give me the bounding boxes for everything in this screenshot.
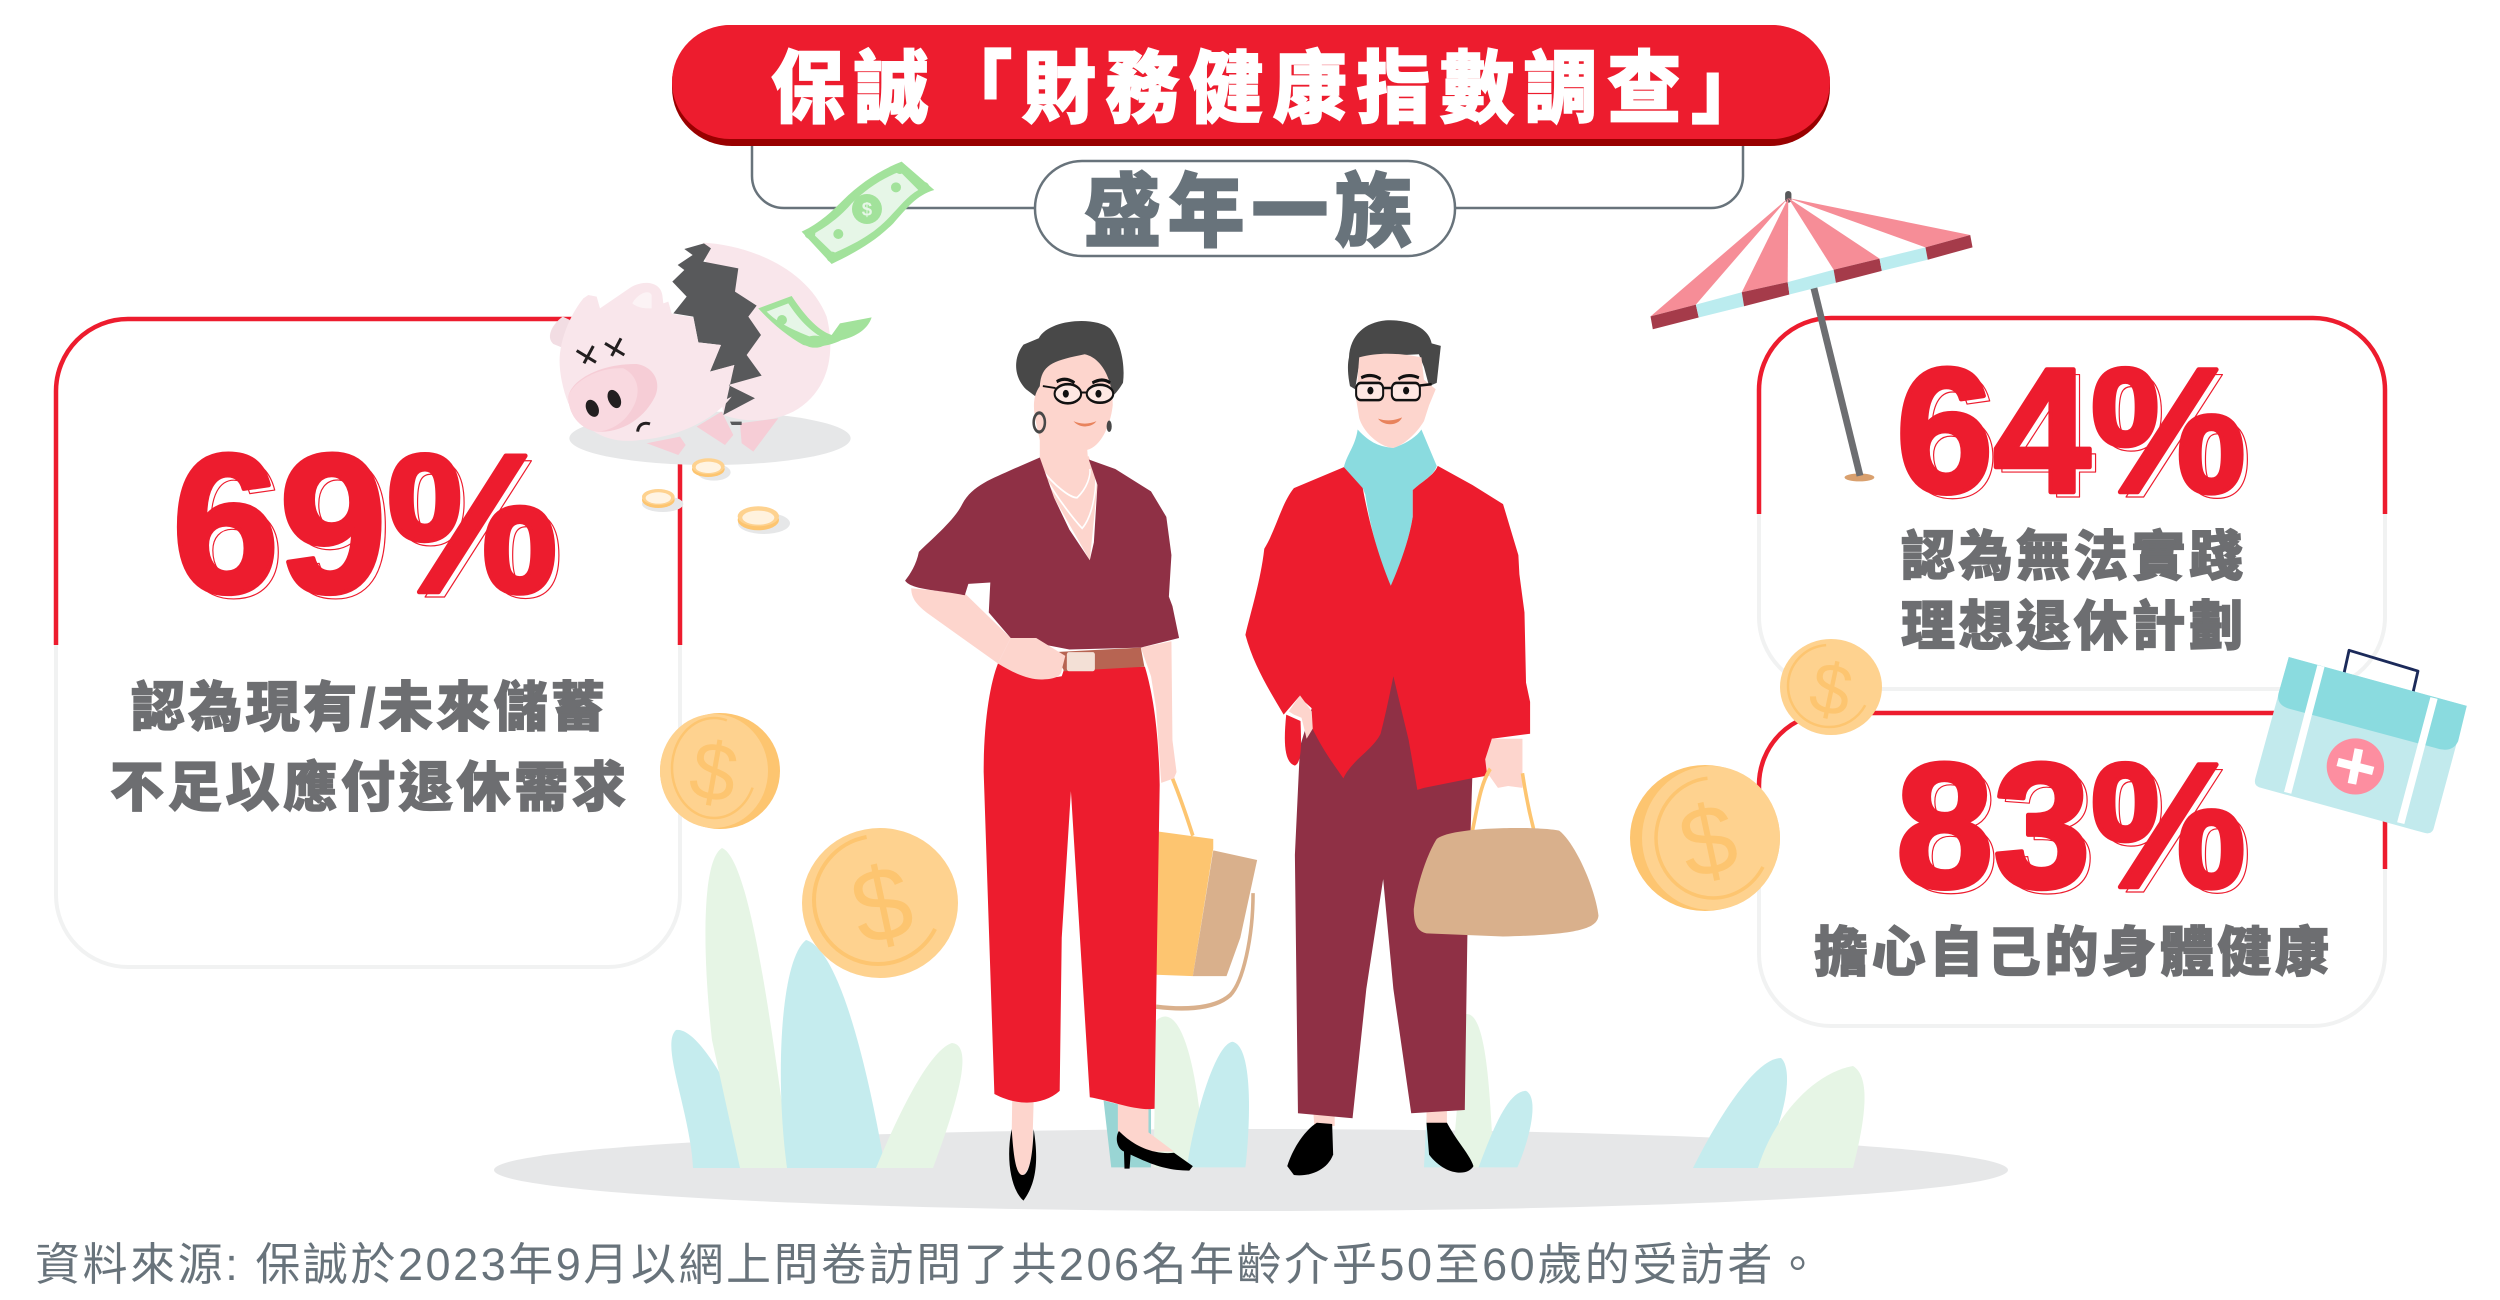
coin: right small	[1780, 639, 1882, 735]
woman: face and hair	[1016, 321, 1124, 469]
man: left hand in pocket	[1285, 695, 1313, 766]
woman: legs and shoes	[1009, 1097, 1193, 1201]
icon: banknote	[802, 162, 934, 264]
icon: first aid kit	[2255, 650, 2467, 833]
flying banknote and piggy bank	[550, 162, 934, 534]
label: savings: 認為現有/未來儲蓄	[131, 678, 605, 738]
man: handbag	[1414, 739, 1598, 937]
woman: hand on hip	[998, 638, 1065, 679]
coin: right large: $	[1670, 781, 1746, 900]
coin: large left: $	[842, 843, 922, 968]
coin: right small: $	[1803, 647, 1859, 733]
ground shadow	[494, 1129, 2008, 1211]
stat 64%: 64%	[1896, 331, 2246, 530]
man: face and hair	[1348, 320, 1441, 448]
coin: large left	[802, 828, 958, 978]
label: savings: 不足以應付退休需求	[110, 758, 626, 818]
panel: 83% health worry	[1759, 713, 2385, 1026]
foliage: left group	[671, 848, 962, 1168]
title text: 保誠「財務健康指數調查」	[771, 46, 1765, 134]
umbrella pole	[1783, 194, 1794, 200]
icon: banknote: $	[862, 198, 873, 219]
coin: beside left panel: $	[683, 724, 744, 821]
panel: 69% savings insufficient	[56, 319, 680, 967]
source note: 資料來源: 保誠於2023年9月以網上問卷訪問了共206名年齡介乎50至60歲的受訪者。	[35, 1239, 1820, 1290]
bracket connector	[752, 146, 1743, 208]
woman: trousers	[984, 664, 1160, 1109]
subtitle text: 盛年一族	[1084, 167, 1412, 257]
panel: 64% retirement ideals	[1759, 318, 2385, 689]
beach umbrella	[1651, 194, 1973, 481]
umbrella canopy	[1651, 198, 1973, 329]
man: legs and shoes	[1287, 1110, 1473, 1175]
woman: bags	[1156, 778, 1257, 1008]
woman: belt	[1054, 648, 1144, 671]
man: scarf inner	[1344, 429, 1437, 593]
man: red jacket	[1245, 466, 1530, 790]
coin: right large	[1630, 765, 1780, 911]
label: retirement: 理想退休計劃	[1901, 597, 2243, 657]
man figure	[1245, 320, 1598, 1175]
icon: piggy bank	[550, 243, 872, 465]
title banner	[672, 25, 1830, 146]
stat 64%: 64%	[1902, 336, 2252, 535]
stat 69%: 69%	[178, 418, 564, 639]
coin: beside left panel	[660, 713, 780, 829]
stat 83%: 83%	[1896, 726, 2246, 925]
label: savings	[110, 678, 626, 818]
label: retirement: 認為無法實踐	[1901, 526, 2243, 587]
label: health: 擔心自己的身體健康	[1814, 923, 2329, 983]
subtitle pill	[1035, 161, 1455, 257]
foliage: centre groups	[1104, 1014, 1533, 1167]
stat 69%: 69%	[172, 413, 558, 634]
label: retirement	[1901, 526, 2243, 657]
woman: arm and chest	[911, 456, 1177, 783]
woman: blouse	[905, 458, 1179, 650]
woman figure	[905, 321, 1257, 1201]
man: trousers	[1295, 657, 1472, 1118]
foliage: right group	[1693, 1058, 1865, 1168]
banknote in piggy	[758, 296, 872, 347]
coins: small dropped	[642, 458, 790, 534]
stat 83%: 83%	[1902, 731, 2252, 930]
